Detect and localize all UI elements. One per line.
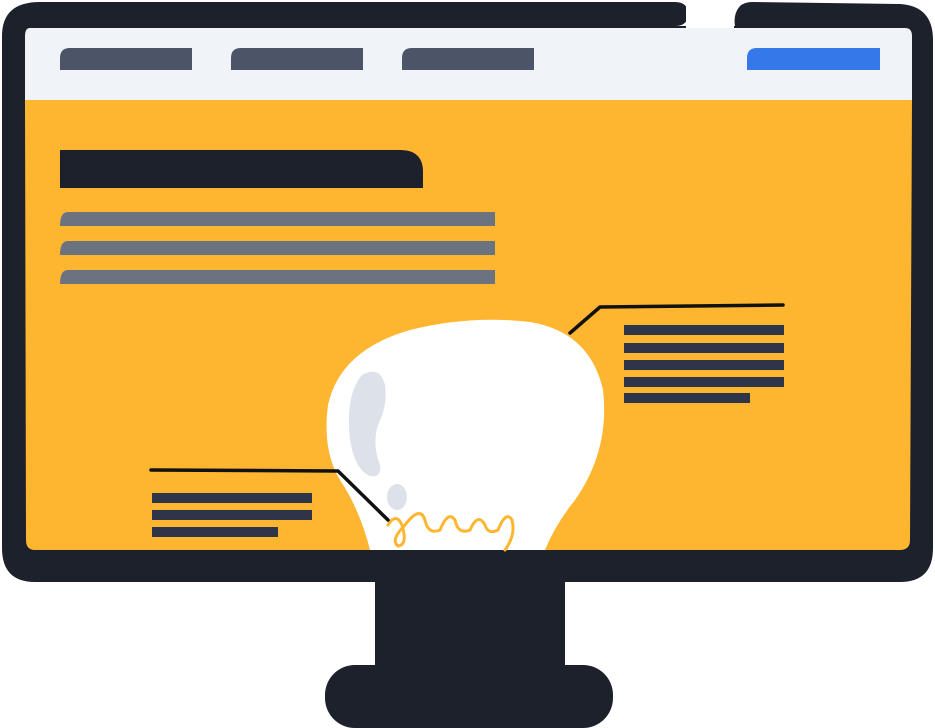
heading bar xyxy=(60,150,423,188)
callout left xyxy=(151,470,388,537)
screen: top navigation bar xyxy=(25,28,912,100)
light bulb xyxy=(326,320,604,550)
monitor frame xyxy=(2,0,933,582)
nav item 3 xyxy=(402,48,534,70)
callout right xyxy=(570,305,784,403)
bulb filament xyxy=(388,514,513,550)
nav item 1 xyxy=(60,48,192,70)
nav button blue xyxy=(747,48,880,70)
monitor stand xyxy=(325,570,613,728)
paragraph lines xyxy=(60,212,495,284)
screen: yellow content area xyxy=(25,100,912,550)
bulb highlight xyxy=(349,372,386,476)
nav item 2 xyxy=(231,48,363,70)
